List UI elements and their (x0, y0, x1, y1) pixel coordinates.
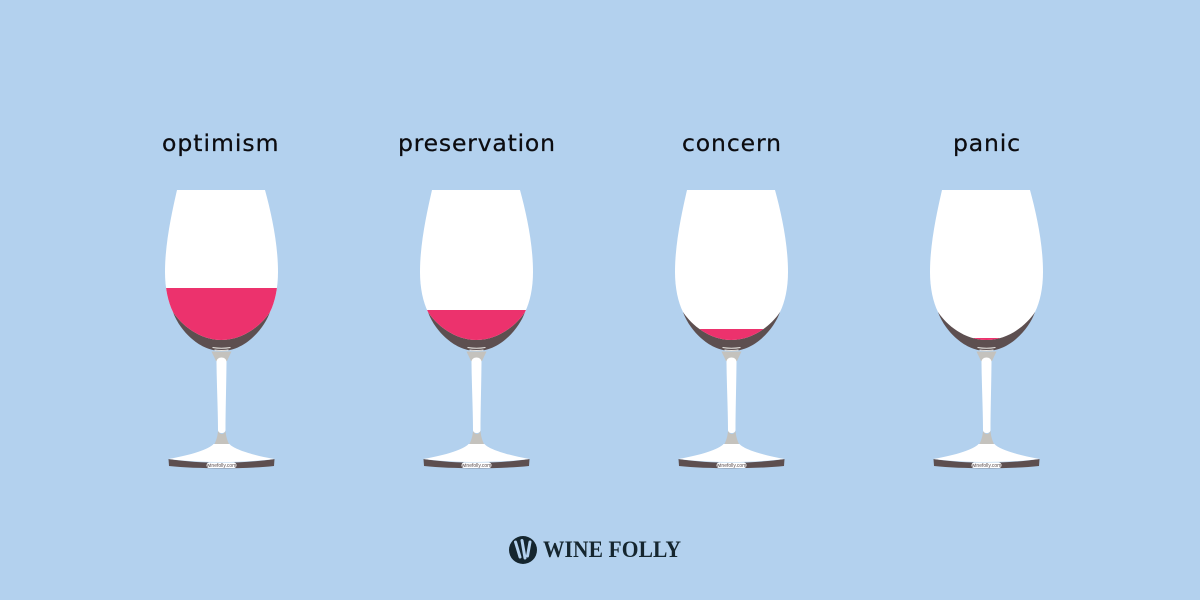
wine level (700, 329, 764, 340)
glass: optimism (162, 190, 282, 469)
icon: logo badge (509, 536, 537, 564)
glass: panic (926, 190, 1046, 469)
label: optimism: optimism (162, 129, 278, 157)
wine level (973, 338, 1000, 340)
glass: preservation (416, 190, 536, 469)
wine level (427, 310, 526, 340)
glass: optimism: winefolly.com (207, 463, 236, 469)
label: panic: panic (953, 129, 1020, 157)
glass: concern (672, 190, 792, 469)
glass: preservation: winefolly.com (462, 463, 491, 469)
label: concern: concern (682, 129, 781, 157)
glass: panic: winefolly.com (972, 463, 1001, 469)
wordmark: WINE FOLLY (543, 536, 681, 562)
logo: Wine Folly (509, 536, 681, 564)
glass: concern: winefolly.com (717, 463, 746, 469)
label: preservation: preservation (398, 129, 555, 157)
wine level (166, 288, 277, 340)
